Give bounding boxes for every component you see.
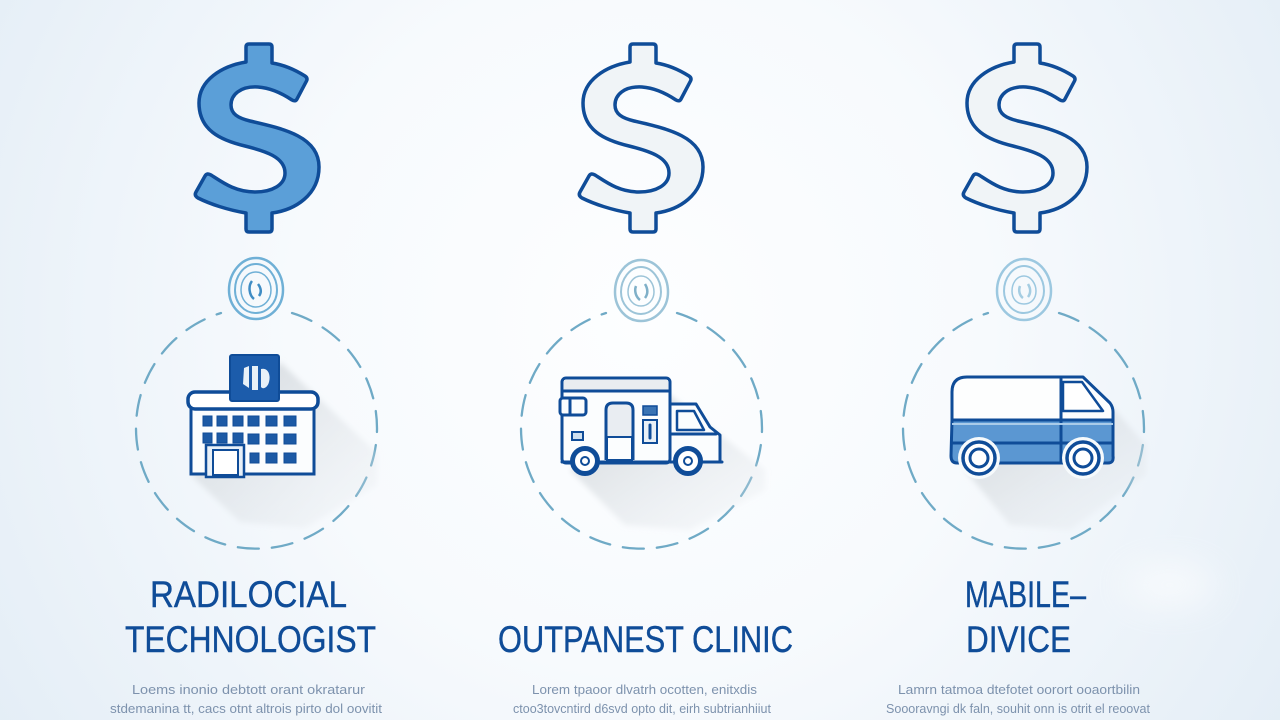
title: OUTPANEST CLINIC: [498, 619, 793, 660]
icon: fingerprint badge: [997, 259, 1051, 320]
dashed ring: [136, 313, 377, 549]
title: TECHNOLOGIST: [125, 619, 376, 660]
title: MABILE–: [965, 574, 1086, 615]
title: [965, 574, 1086, 660]
title: DIVICE: [966, 619, 1071, 660]
description: Loems inonio debtott orant okratarur: [132, 683, 365, 697]
description: Lorem tpaoor dlvatrh ocotten, enitxdis: [532, 683, 757, 697]
icon: fingerprint badge: [229, 258, 283, 319]
column: outpatient clinic: [498, 44, 793, 716]
description: [110, 683, 383, 716]
icon: fingerprint badge: [615, 260, 668, 321]
title: RADILOCIAL: [150, 574, 347, 615]
title: [125, 574, 376, 660]
icon: filled dollar sign: [195, 44, 319, 232]
icon shadow: [570, 395, 765, 530]
icon: delivery van: [951, 377, 1113, 479]
dashed ring: [903, 313, 1144, 549]
description: [513, 683, 772, 716]
icon: outline dollar sign: [963, 44, 1087, 232]
description: Lamrn tatmoa dtefotet oorort ooaortbilin: [898, 683, 1140, 697]
icon: hospital building: [188, 355, 318, 477]
column: radiological technologist: [110, 44, 383, 716]
dashed ring: [521, 313, 762, 549]
description: [886, 683, 1151, 716]
description: ctoo3tovcntird d6svd opto dit, eirh subtrianhiiut: [513, 702, 772, 716]
icon: outline dollar sign: [579, 44, 703, 232]
icon: ambulance: [560, 378, 722, 474]
icon shadow: [192, 362, 377, 528]
icon shadow: [965, 405, 1146, 530]
column: mobile device: [886, 44, 1151, 716]
description: stdemanina tt, cacs otnt altrois pirto dol oovitit: [110, 702, 383, 716]
description: Soooravngi dk faln, souhit onn is otrit el reoovat: [886, 702, 1151, 716]
